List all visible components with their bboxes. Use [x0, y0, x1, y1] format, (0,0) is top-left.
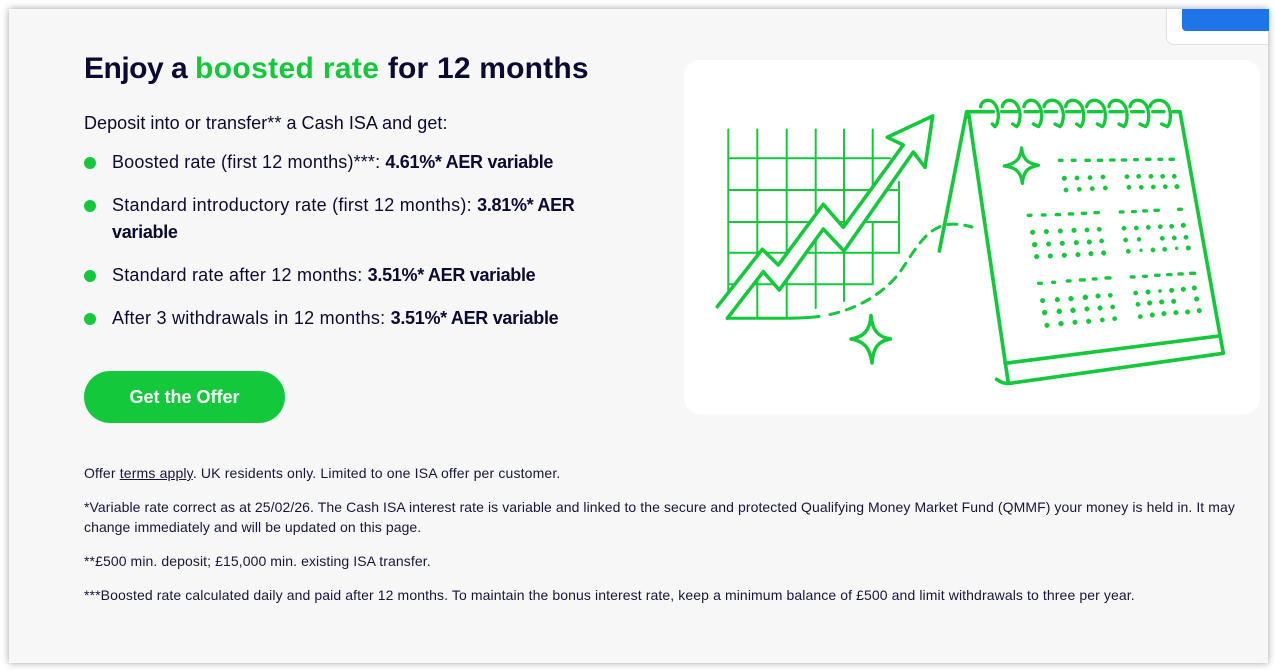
bullet 3 text: Standard rate after 12 months: 3.51%* AER variable: [112, 265, 535, 285]
blue button fragment: [1182, 9, 1269, 31]
illustration panel: [684, 60, 1260, 414]
fine print: offer terms: Offer terms apply. UK residents only. Limited to one ISA offer per customer.: [84, 465, 560, 481]
bullet list: [84, 152, 575, 328]
base line and dashed curve: [727, 224, 972, 318]
rising arrow: [717, 116, 933, 318]
calendar date dots: [1030, 174, 1202, 328]
calendar body: [939, 112, 1223, 383]
fine print: boosted rate note: ***Boosted rate calculated daily and paid after 12 months. To maintain the bonus interest rate, keep a minimum balance of £500 and limit withdrawals to three per year.: [84, 587, 1135, 603]
calendar rings: [981, 100, 1170, 127]
bullet marker 2: [84, 200, 96, 212]
sparkle: [851, 316, 890, 363]
bullet marker 1: [84, 157, 96, 169]
bullet 2 text: Standard introductory rate (first 12 months): 3.81%* AER: [112, 195, 575, 215]
calendar: [939, 100, 1223, 383]
button: get the offer: Get the Offer: [129, 387, 240, 407]
chart grid: [728, 130, 899, 318]
bullet 2 text: [112, 195, 575, 242]
bullet 1 text: Boosted rate (first 12 months)***: 4.61%* AER variable: [112, 152, 553, 172]
calendar date dashes: [1028, 159, 1195, 283]
fine print: variable rate note: change immediately and will be updated on this page.: [84, 519, 421, 535]
title: Enjoy a boosted rate for 12 months: [84, 52, 589, 85]
calendar sparkle: [1004, 148, 1038, 183]
cropped widget top right: [1166, 9, 1268, 45]
button: get the offer: [84, 371, 285, 423]
bullet 4 text: After 3 withdrawals in 12 months: 3.51%* AER variable: [112, 308, 558, 328]
bullet 2 text: variable: [112, 222, 178, 242]
fine print: variable rate note: [84, 499, 1235, 535]
fine print: variable rate note: *Variable rate correct as at 25/02/26. The Cash ISA interest rate is variable and linked to the secure and protected Qualifying Money Market Fund (QMMF) your money is held in. It may: [84, 499, 1235, 515]
fine print: minimum deposit: **£500 min. deposit; £15,000 min. existing ISA transfer.: [84, 553, 431, 569]
bullet marker 4: [84, 313, 96, 325]
bullet marker 3: [84, 270, 96, 282]
intro text: Deposit into or transfer** a Cash ISA and get:: [84, 113, 448, 133]
